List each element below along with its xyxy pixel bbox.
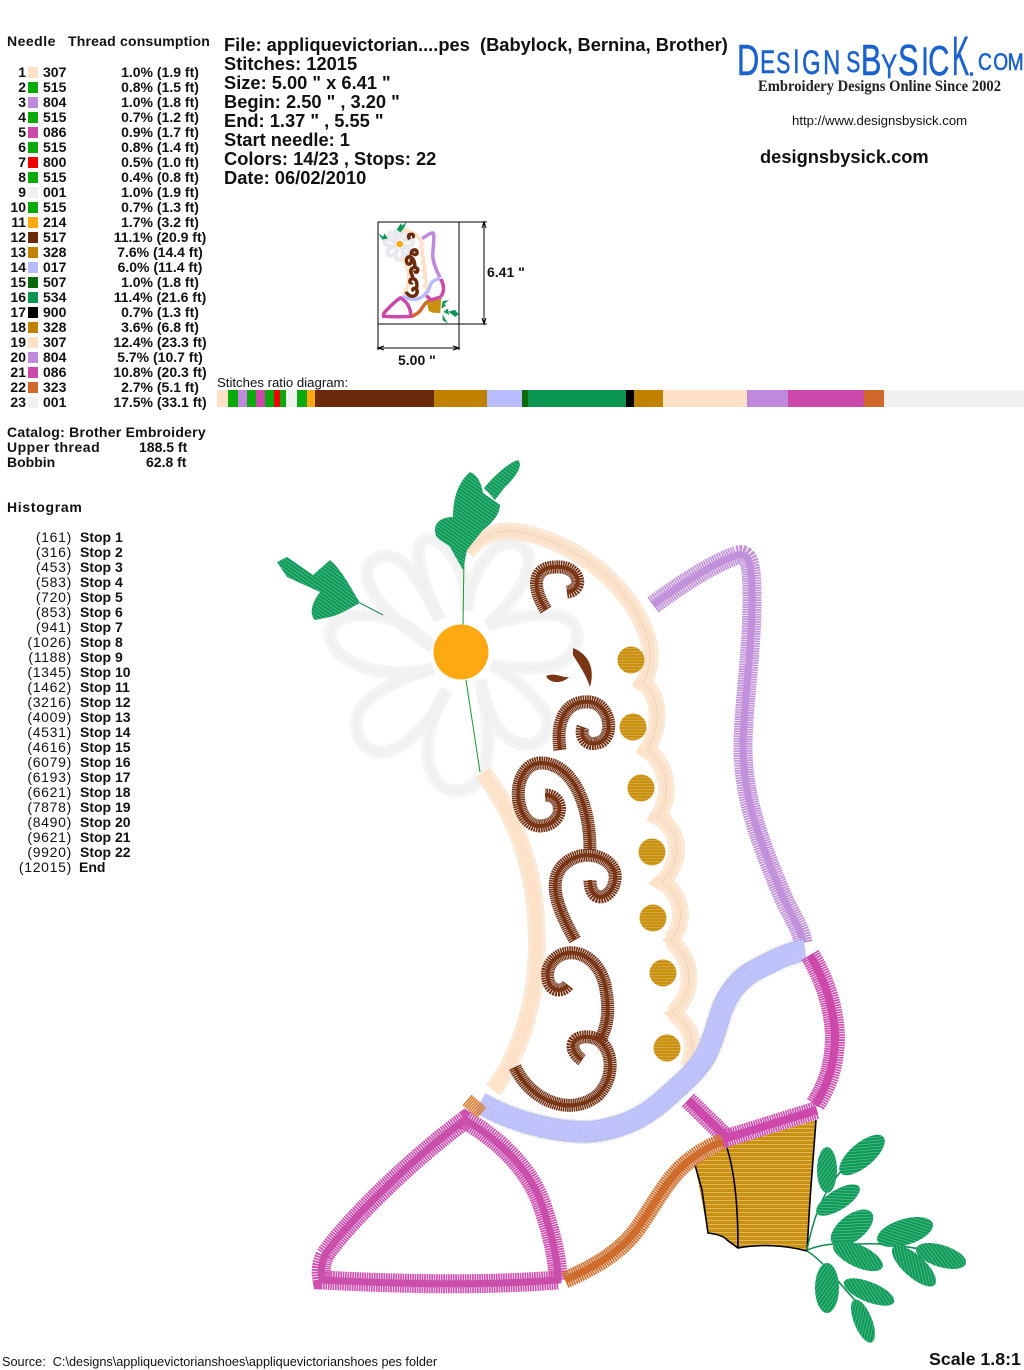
needle thread table: 534: [43, 289, 66, 305]
size diagram with boot thumbnail: [376, 220, 525, 368]
needle thread table: 21: [10, 364, 26, 380]
brand logo: I: [921, 40, 929, 84]
histogram stop list: (1026): [27, 634, 72, 650]
width dimension arrow: [378, 346, 459, 350]
needle thread table: 10.8% (20.3 ft): [113, 364, 207, 380]
needle thread table: 9: [18, 184, 26, 200]
needle thread table: 0.7% (1.3 ft): [121, 199, 199, 215]
needle thread table: 086: [43, 364, 66, 380]
histogram stop list: Stop 4: [80, 574, 123, 590]
brand logo: D: [737, 37, 759, 85]
needle thread table: 086: [43, 124, 66, 140]
brown swirls: [515, 567, 615, 1105]
needle thread table: 0.7% (1.3 ft): [121, 304, 199, 320]
needle thread table: 517: [43, 229, 66, 245]
daisy flower petals: [330, 539, 577, 791]
needle thread table: 804: [43, 94, 66, 110]
brand logo: C: [928, 37, 949, 84]
needle thread table: 001: [43, 394, 66, 410]
needle thread table: 0.8% (1.4 ft): [121, 139, 199, 155]
brand logo: I: [793, 43, 800, 81]
histogram stop list: Stop 18: [80, 784, 131, 800]
needle thread table: 5: [18, 124, 26, 140]
histogram stop list: Stop 3: [80, 559, 123, 575]
needle thread table: 0.9% (1.7 ft): [121, 124, 199, 140]
needle thread table: 10: [10, 199, 26, 215]
needle thread table: 11: [11, 214, 26, 230]
histogram stop list: (1345): [27, 664, 72, 680]
website name: designsbysick.com: [760, 146, 929, 167]
brand logo: O: [993, 48, 1008, 76]
histogram stop list: (6193): [27, 769, 72, 785]
needle thread table: 14: [10, 259, 26, 275]
needle thread table: 3: [18, 94, 26, 110]
histogram stop list: Stop 9: [80, 649, 123, 665]
gold dots: [618, 646, 680, 1062]
histogram stop list: (1188): [28, 649, 72, 665]
boot thumbnail: [378, 222, 459, 324]
catalog summary: 62.8 ft: [146, 454, 186, 470]
needle thread table: 12.4% (23.3 ft): [113, 334, 207, 350]
histogram stop list: (3216): [27, 694, 72, 710]
top leaves: [435, 460, 520, 570]
scale note: Scale 1.8:1: [929, 1349, 1021, 1369]
needle thread table: 19: [10, 334, 26, 350]
brand logo: .: [969, 59, 974, 79]
needle thread table: 214: [43, 214, 66, 230]
histogram stop list: (4009): [27, 709, 72, 725]
needle thread table: 17: [10, 304, 26, 320]
catalog summary: Catalog: Brother Embroidery: [7, 424, 206, 440]
needle thread table: 515: [43, 139, 66, 155]
needle thread table: 1.7% (3.2 ft): [121, 214, 199, 230]
needle thread table: 7: [18, 154, 26, 170]
brand logo: S: [846, 47, 860, 79]
histogram stop list: (941): [36, 619, 72, 635]
left leaves: [277, 557, 383, 620]
histogram stop list: Stop 10: [80, 664, 131, 680]
needle thread table: 8: [18, 169, 26, 185]
needle thread table: 800: [43, 154, 66, 170]
right sprig stems: [807, 1170, 925, 1300]
histogram heading: Histogram: [7, 499, 83, 515]
histogram stop list: (9621): [27, 829, 72, 845]
boot heel: [695, 1120, 816, 1251]
blue vamp band: [480, 950, 805, 1132]
histogram stop list: (8490): [27, 814, 72, 830]
histogram stop list: (4531): [27, 724, 72, 740]
needle thread table: 5.7% (10.7 ft): [117, 349, 203, 365]
histogram stop list: (6621): [27, 784, 72, 800]
orange sole: [467, 1100, 723, 1280]
flower center: [434, 624, 488, 680]
histogram stop list: (6079): [27, 754, 72, 770]
needle thread table: 1.0% (1.9 ft): [121, 184, 199, 200]
histogram stop list: Stop 13: [80, 709, 131, 725]
needle thread table: 0.7% (1.2 ft): [121, 109, 199, 125]
histogram stop list: Stop 11: [80, 679, 130, 695]
histogram stop list: Stop 19: [80, 799, 131, 815]
needle thread table: 0.5% (1.0 ft): [121, 154, 199, 170]
brand logo: N: [823, 44, 840, 82]
brand logo: B: [861, 37, 881, 85]
needle thread table: 001: [43, 184, 66, 200]
needle thread table: 20: [10, 349, 26, 365]
histogram stop list: (853): [36, 604, 72, 620]
needle thread table: 804: [43, 349, 66, 365]
catalog summary: Upper thread: [7, 439, 100, 455]
needle thread table: 11.4% (21.6 ft): [114, 289, 206, 305]
needle thread table: 4: [18, 109, 26, 125]
lavender boot back: [653, 555, 803, 943]
histogram stop list: (9920): [27, 844, 72, 860]
needle thread table: 2: [18, 79, 26, 95]
stitches ratio label: Stitches ratio diagram:: [217, 375, 348, 390]
histogram stop list: Stop 16: [80, 754, 131, 770]
design file info: File: appliquevictorian....pes (Babylock, Bernina, Brother) Stitches: 12015 Size: 5.00 " x 6.41 " Begin: 2.50 " , 3.20 " End: 1.37 " , 5.55 " Start needle: 1 Colors: 14/23 , Stops: 22 Date: 06/02/2010: [224, 34, 728, 188]
catalog summary: 188.5 ft: [139, 439, 187, 455]
histogram stop list: (453): [36, 559, 72, 575]
needle thread table: 22: [10, 379, 26, 395]
needle thread table: 7.6% (14.4 ft): [117, 244, 203, 260]
main embroidery boot artwork: [277, 460, 966, 1343]
histogram stop list: Stop 2: [80, 544, 123, 560]
needle thread table: 515: [43, 79, 66, 95]
height label: 6.41 ": [487, 264, 525, 280]
source path footer: Source: C:\designs\appliquevictorianshoes\appliquevictorianshoes pes folder: [2, 1355, 437, 1369]
brand logo: C: [978, 48, 992, 76]
needle thread table: 17.5% (33.1 ft): [113, 394, 207, 410]
website url: http://www.designsbysick.com: [792, 113, 967, 128]
needle thread table: 1.0% (1.8 ft): [121, 94, 199, 110]
histogram stop list: Stop 20: [80, 814, 131, 830]
histogram stop list: End: [79, 859, 105, 875]
needle thread table: 13: [10, 244, 26, 260]
height dimension arrow: [482, 222, 486, 324]
histogram stop list: Stop 14: [80, 724, 131, 740]
catalog summary: Bobbin: [7, 454, 55, 470]
magenta outlines: [321, 955, 835, 1284]
brand logo: M: [1008, 48, 1024, 76]
needle thread table: 6: [18, 139, 26, 155]
histogram stop list: Stop 12: [80, 694, 131, 710]
flower stem: [463, 556, 480, 772]
histogram stop list: (161): [36, 529, 72, 545]
histogram stop list: (12015): [19, 859, 72, 875]
needle thread table: 323: [43, 379, 66, 395]
needle thread table: 1.0% (1.8 ft): [121, 274, 199, 290]
needle thread table: 307: [43, 334, 66, 350]
small brown accents: [546, 648, 592, 687]
needle thread table: 23: [10, 394, 26, 410]
needle thread table: 18: [10, 319, 26, 335]
histogram stop list: Stop 22: [80, 844, 131, 860]
needle thread table: 1: [18, 64, 26, 80]
needle thread table: 900: [43, 304, 66, 320]
needle table header: [7, 33, 210, 49]
histogram stop list: (7878): [27, 799, 72, 815]
catalog summary: [7, 424, 206, 470]
needle thread table: 11.1% (20.9 ft): [114, 229, 206, 245]
histogram stop list: Stop 15: [80, 739, 131, 755]
needle thread table: 0.8% (1.5 ft): [121, 79, 199, 95]
brand logo: S: [776, 48, 790, 80]
needle thread table: 2.7% (5.1 ft): [121, 379, 199, 395]
needle thread table: 3.6% (6.8 ft): [121, 319, 199, 335]
brand logo: G: [802, 44, 821, 82]
peach boot outline: [467, 531, 692, 1090]
needle thread table: 515: [43, 199, 66, 215]
histogram stop list: (4616): [27, 739, 72, 755]
histogram stop list: (316): [36, 544, 72, 560]
histogram stop list: [19, 529, 131, 875]
needle thread table: 16: [10, 289, 26, 305]
histogram stop list: (583): [36, 574, 72, 590]
needle thread table: [10, 64, 207, 410]
thumbnail frame: [378, 222, 487, 350]
brand logo: E: [760, 44, 775, 80]
needle thread table: 307: [43, 64, 66, 80]
needle thread table: 328: [43, 319, 66, 335]
right sprig leaves: [811, 1128, 969, 1346]
needle thread table: 515: [43, 169, 66, 185]
needle table header: Needle: [7, 33, 56, 49]
needle thread table: 515: [43, 109, 66, 125]
histogram stop list: Stop 7: [80, 619, 123, 635]
needle thread table: 12: [10, 229, 26, 245]
needle thread table: 0.4% (0.8 ft): [121, 169, 199, 185]
needle thread table: 1.0% (1.9 ft): [121, 64, 199, 80]
needle thread table: 6.0% (11.4 ft): [118, 259, 202, 275]
stitches ratio bar: [217, 390, 1024, 407]
histogram stop list: Stop 8: [80, 634, 123, 650]
histogram stop list: Stop 17: [80, 769, 131, 785]
brand logo: [737, 26, 1024, 85]
needle thread table: 507: [43, 274, 66, 290]
needle thread table: 328: [43, 244, 66, 260]
histogram stop list: (1462): [27, 679, 72, 695]
needle thread table: 15: [10, 274, 26, 290]
brand logo: S: [898, 37, 919, 85]
needle thread table: 017: [43, 259, 66, 275]
histogram stop list: Stop 5: [80, 589, 123, 605]
brand logo: Y: [881, 48, 897, 85]
histogram stop list: (720): [36, 589, 72, 605]
histogram stop list: Stop 21: [80, 829, 131, 845]
needle table header: Thread consumption: [68, 33, 210, 49]
histogram stop list: Stop 6: [80, 604, 123, 620]
width label: 5.00 ": [398, 352, 436, 368]
histogram stop list: Stop 1: [80, 529, 123, 545]
